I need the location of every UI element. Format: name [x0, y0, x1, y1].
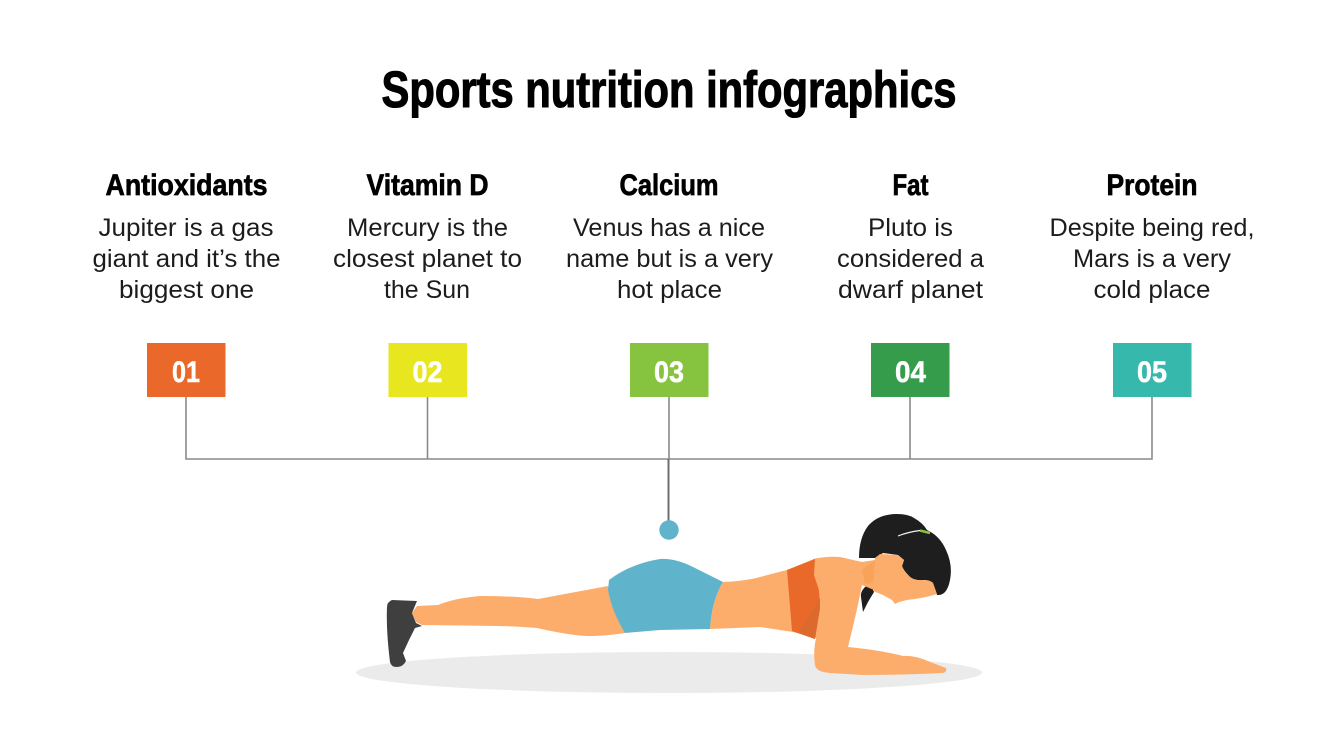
heading: Calcium: Calcium — [620, 169, 718, 202]
text: Antioxidants description: biggest one — [119, 276, 254, 304]
text: Protein description: Mars is a very — [1073, 245, 1231, 273]
text: Fat description — [837, 214, 984, 304]
number box 05 — [1113, 343, 1192, 397]
floor shadow — [356, 652, 982, 693]
leg — [412, 586, 625, 636]
number box 02 — [388, 343, 467, 397]
connector lines — [186, 397, 1152, 522]
number box 03 — [630, 343, 708, 397]
number box 05: 05 — [1137, 356, 1167, 389]
connector dot — [659, 520, 679, 540]
heading: Protein: Protein — [1106, 169, 1198, 202]
text: Antioxidants description: Jupiter is a gas — [98, 214, 274, 242]
number box 02: 02 — [412, 356, 442, 389]
text: Protein description: cold place — [1094, 276, 1210, 304]
sports top — [787, 559, 820, 639]
text: Calcium description: hot place — [617, 276, 722, 304]
text: Calcium description: Venus has a nice — [573, 214, 765, 242]
column 2: Vitamin D — [333, 169, 522, 397]
text: Vitamin D description — [333, 214, 522, 304]
heading: Vitamin D: Vitamin D — [366, 169, 488, 202]
column 4: Fat — [837, 169, 984, 397]
text: Vitamin D description: closest planet to — [333, 245, 522, 273]
hair — [859, 514, 951, 595]
number box 01: 01 — [172, 356, 200, 389]
text: Vitamin D description: Mercury is the — [347, 214, 508, 242]
hair tie — [898, 530, 930, 536]
number box 04: 04 — [895, 356, 926, 389]
number box 04 — [871, 343, 950, 397]
text: Protein description: Despite being red, — [1050, 214, 1254, 242]
text: Antioxidants description — [92, 214, 280, 304]
text: Calcium description: name but is a very — [566, 245, 774, 273]
column 3: Calcium — [566, 169, 774, 397]
torso and arm — [710, 557, 946, 675]
shoe — [387, 600, 422, 667]
text: Vitamin D description: the Sun — [384, 276, 470, 304]
title: Sports nutrition infographics — [382, 61, 956, 118]
text: Fat description: Pluto is — [868, 214, 953, 242]
text: Protein description — [1050, 214, 1254, 304]
shorts — [608, 559, 723, 633]
ponytail — [861, 583, 874, 612]
text: Antioxidants description: giant and it’s the — [92, 245, 280, 273]
sports top shading — [798, 598, 820, 639]
number box 03: 03 — [654, 356, 684, 389]
column 1: Antioxidants — [92, 169, 280, 397]
number box 01 — [147, 343, 226, 397]
text: Calcium description — [566, 214, 774, 304]
heading: Antioxidants: Antioxidants — [106, 169, 268, 202]
heading: Fat: Fat — [892, 169, 929, 202]
head — [873, 554, 937, 604]
neck shading — [862, 560, 875, 584]
column 5: Protein — [1050, 169, 1254, 397]
text: Fat description: dwarf planet — [838, 276, 983, 304]
text: Fat description: considered a — [837, 245, 984, 273]
illustration: woman doing a plank — [387, 514, 951, 675]
